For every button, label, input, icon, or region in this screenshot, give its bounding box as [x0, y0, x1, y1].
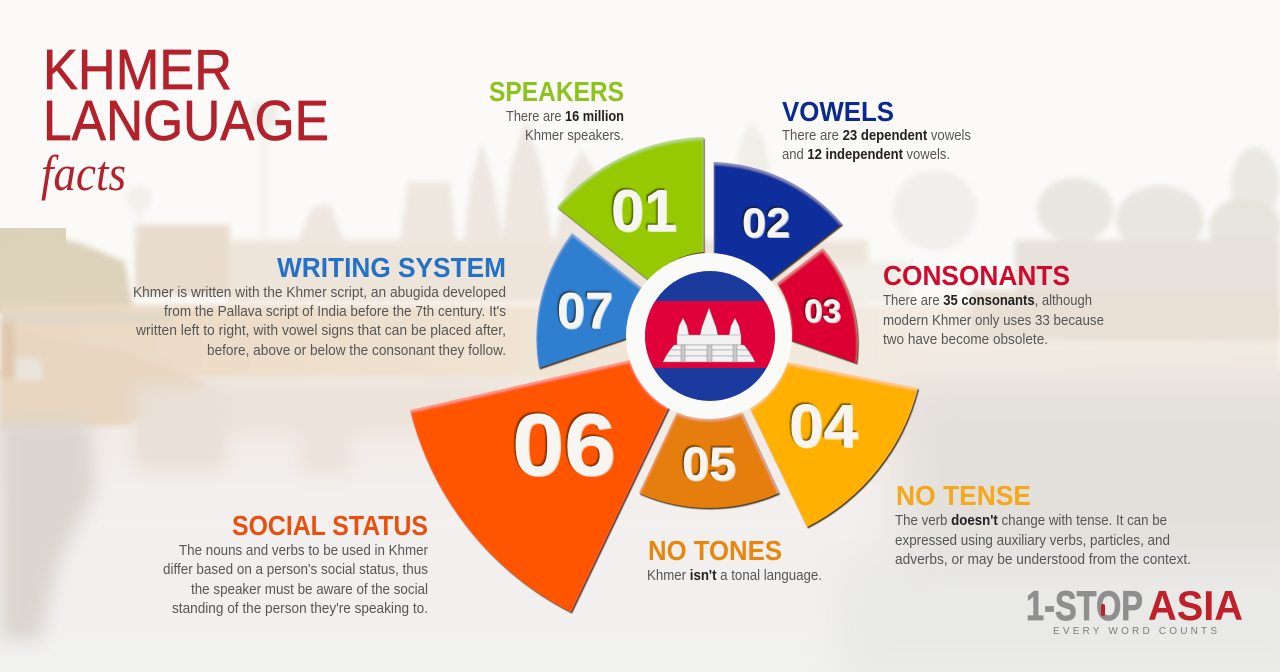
segment 04 yellow	[750, 362, 918, 527]
right palm trees	[790, 147, 1280, 340]
panel: no tones: NO TONES	[648, 535, 782, 566]
panel: consonants: two have become obsolete.	[883, 331, 1048, 348]
panel: writing system: WRITING SYSTEM	[277, 252, 506, 283]
logo: 1-Stop Asia	[1026, 582, 1243, 637]
segment 02 blue: 02	[742, 199, 790, 246]
segment 07 light blue: 07	[557, 282, 613, 339]
water reflections	[0, 385, 505, 640]
logo: 1-Stop Asia: EVERY WORD COUNTS	[1053, 626, 1217, 637]
panel: no tones	[647, 535, 822, 584]
panel: social status: standing of the person they're speaking to.	[172, 600, 428, 617]
icon: Cambodian flag medallion	[626, 253, 792, 419]
title: KHMER	[43, 38, 232, 102]
panel: speakers: SPEAKERS	[489, 76, 624, 107]
panel: writing system: from the Pallava script of India before the 7th century. It's	[164, 303, 506, 320]
panel: consonants: modern Khmer only uses 33 because	[883, 312, 1104, 329]
segment 05 orange: 05	[682, 437, 736, 490]
right water shading	[840, 385, 1280, 672]
panel: writing system: Khmer is written with the Khmer script, an abugida developed	[133, 284, 506, 301]
panel: consonants: CONSONANTS	[883, 260, 1070, 291]
panel: consonants	[883, 260, 1104, 348]
logo: 1-Stop Asia: 1-STOP	[1026, 582, 1143, 629]
title: LANGUAGE	[43, 89, 329, 153]
panel: social status: The nouns and verbs to be used in Khmer	[179, 542, 428, 559]
panel: vowels: There are 23 dependent vowels	[782, 127, 971, 144]
segment 01 green	[557, 137, 704, 280]
panel: social status: SOCIAL STATUS	[232, 510, 428, 541]
icon: Angkor Wat emblem	[663, 308, 755, 362]
panel: vowels	[782, 96, 971, 163]
segment 06 red-orange: 06	[512, 395, 616, 494]
logo: 1-Stop Asia: ASIA	[1148, 582, 1243, 629]
panel: social status: the speaker must be aware of the social	[191, 581, 428, 598]
segment 06 red-orange	[410, 360, 669, 612]
panel: vowels: and 12 independent vowels.	[782, 146, 950, 163]
title: facts	[41, 145, 126, 201]
panel: speakers: There are 16 million	[506, 108, 624, 125]
segment 07 light blue	[536, 233, 642, 368]
segment 04 yellow: 04	[789, 392, 858, 460]
panel: writing system: written left to right, with vowel signs that can be placed after,	[135, 322, 506, 339]
panel: social status	[163, 510, 428, 617]
left tree mass and shore	[0, 228, 66, 313]
panel: no tense: NO TENSE	[896, 480, 1031, 511]
segmented wheel	[410, 137, 918, 612]
segment 02 blue	[714, 162, 842, 280]
panel: consonants: There are 35 consonants, although	[883, 292, 1092, 309]
panel: no tense	[895, 480, 1191, 568]
panel: speakers	[489, 76, 624, 144]
panel: speakers: Khmer speakers.	[525, 127, 624, 144]
segment 01 green: 01	[611, 178, 677, 244]
panel: vowels: VOWELS	[782, 96, 894, 127]
segment 03 red: 03	[804, 293, 841, 329]
panel: no tones: Khmer isn't a tonal language.	[647, 567, 822, 584]
panel: no tense: adverbs, or may be understood from the context.	[895, 551, 1191, 568]
panel: writing system: before, above or below the consonant they follow.	[207, 342, 506, 359]
panel: no tense: The verb doesn't change with tense. It can be	[895, 512, 1167, 529]
title	[41, 38, 329, 201]
panel: writing system	[133, 252, 506, 359]
panel: social status: differ based on a person's social status, thus	[163, 561, 428, 578]
segment 05 orange	[639, 412, 779, 508]
segment 03 red	[777, 248, 858, 363]
panel: no tense: expressed using auxiliary verbs, particles, and	[895, 532, 1170, 549]
distant towers	[296, 116, 772, 245]
